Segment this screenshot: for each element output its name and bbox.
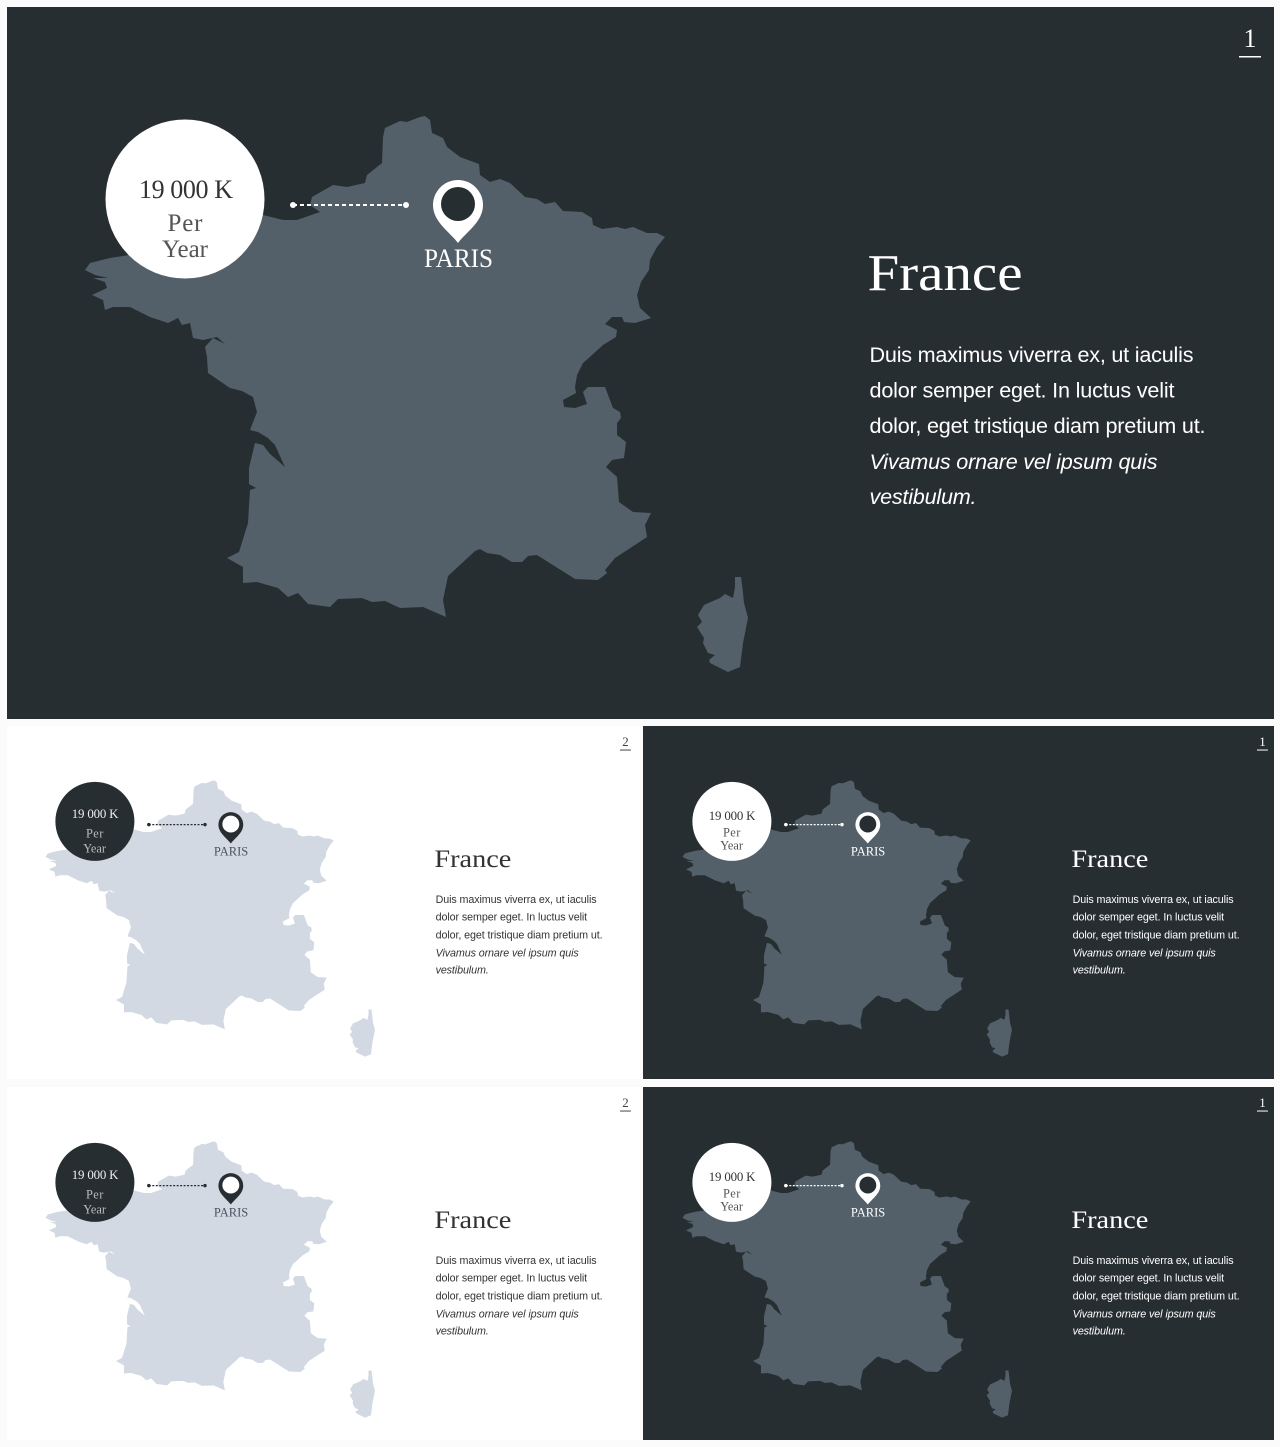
dotted connector — [147, 823, 207, 826]
panel: dark slide top — [643, 726, 1274, 1079]
heading: France — [1071, 844, 1148, 873]
heading: France — [434, 844, 511, 873]
panel: main slide France — [7, 7, 1274, 719]
body text: Duis maximus viverra ex, ut iaculis — [870, 342, 1194, 367]
icon: Paris pin — [855, 812, 880, 843]
body text — [870, 342, 1206, 509]
body text: Vivamus ornare vel ipsum quis — [1073, 1308, 1216, 1320]
callout circle: Year — [83, 841, 107, 855]
callout circle: 19 000 K — [709, 808, 756, 823]
body text — [1073, 1255, 1240, 1338]
map of France — [682, 1141, 1012, 1418]
icon: Paris pin — [855, 1173, 880, 1204]
heading: France — [434, 1205, 511, 1234]
map of France — [85, 116, 748, 672]
callout circle — [55, 1143, 134, 1222]
body text: vestibulum. — [1073, 1326, 1126, 1338]
body text: dolor, eget tristique diam pretium ut. — [436, 929, 603, 941]
icon: Paris pin — [218, 1173, 243, 1204]
map of France — [682, 780, 1012, 1057]
callout circle: Per — [86, 827, 104, 841]
body text: dolor semper eget. In luctus velit — [1073, 1273, 1224, 1285]
page number — [620, 734, 631, 751]
callout circle: Per — [168, 210, 203, 237]
body text: dolor semper eget. In luctus velit — [436, 1273, 587, 1285]
callout circle — [55, 782, 134, 861]
dotted connector — [290, 202, 409, 208]
body text: vestibulum. — [870, 484, 976, 509]
heading: France — [868, 245, 1022, 302]
panel: light slide top — [7, 726, 640, 1079]
city label: PARIS — [214, 843, 248, 858]
body text: vestibulum. — [436, 1326, 489, 1338]
body text: dolor semper eget. In luctus velit — [870, 378, 1174, 402]
body text: dolor, eget tristique diam pretium ut. — [436, 1290, 603, 1302]
page number: 1 — [1244, 24, 1256, 53]
page number — [1239, 24, 1261, 58]
callout circle — [692, 782, 771, 861]
callout circle: Year — [720, 1199, 744, 1213]
body text: Vivamus ornare vel ipsum quis — [436, 1308, 579, 1320]
body text — [436, 1255, 603, 1338]
page number: 1 — [1259, 734, 1266, 749]
page number — [1257, 1095, 1268, 1112]
icon: Paris pin — [433, 180, 483, 243]
callout circle: Per — [723, 1187, 741, 1201]
callout circle: 19 000 K — [72, 1167, 119, 1182]
body text: Duis maximus viverra ex, ut iaculis — [436, 1255, 597, 1267]
map of France — [45, 780, 375, 1057]
city label: PARIS — [851, 843, 885, 858]
city label: PARIS — [851, 1204, 885, 1219]
body text — [1073, 894, 1240, 977]
city label: PARIS — [214, 1204, 248, 1219]
body text: dolor semper eget. In luctus velit — [1073, 912, 1224, 924]
panel: light slide bottom — [7, 1087, 640, 1440]
page number: 2 — [622, 734, 629, 749]
callout circle: Year — [720, 838, 744, 852]
icon: Paris pin — [218, 812, 243, 843]
callout circle: 19 000 K — [72, 806, 119, 821]
body text: dolor semper eget. In luctus velit — [436, 912, 587, 924]
dotted connector — [784, 823, 844, 826]
body text: Vivamus ornare vel ipsum quis — [436, 947, 579, 959]
body text: vestibulum. — [436, 965, 489, 977]
city label: PARIS — [424, 244, 493, 273]
page number — [620, 1095, 631, 1112]
body text: Duis maximus viverra ex, ut iaculis — [1073, 894, 1234, 906]
callout circle: Year — [83, 1202, 107, 1216]
callout circle: Per — [86, 1188, 104, 1202]
callout circle: 19 000 K — [709, 1169, 756, 1184]
callout circle: 19 000 K — [139, 175, 233, 204]
body text: Vivamus ornare vel ipsum quis — [1073, 947, 1216, 959]
dotted connector — [784, 1184, 844, 1187]
body text — [436, 894, 603, 977]
body text: vestibulum. — [1073, 965, 1126, 977]
body text: dolor, eget tristique diam pretium ut. — [1073, 1290, 1240, 1302]
page number: 1 — [1259, 1095, 1266, 1110]
panel: dark slide bottom — [643, 1087, 1274, 1440]
page number: 2 — [622, 1095, 629, 1110]
map of France — [45, 1141, 375, 1418]
heading: France — [1071, 1205, 1148, 1234]
body text: Duis maximus viverra ex, ut iaculis — [436, 894, 597, 906]
page number — [1257, 734, 1268, 751]
callout circle: Year — [162, 236, 209, 263]
callout circle — [692, 1143, 771, 1222]
body text: Duis maximus viverra ex, ut iaculis — [1073, 1255, 1234, 1267]
body text: Vivamus ornare vel ipsum quis — [870, 449, 1158, 474]
body text: dolor, eget tristique diam pretium ut. — [870, 413, 1206, 438]
callout circle — [106, 120, 264, 278]
body text: dolor, eget tristique diam pretium ut. — [1073, 929, 1240, 941]
dotted connector — [147, 1184, 207, 1187]
callout circle: Per — [723, 826, 741, 840]
